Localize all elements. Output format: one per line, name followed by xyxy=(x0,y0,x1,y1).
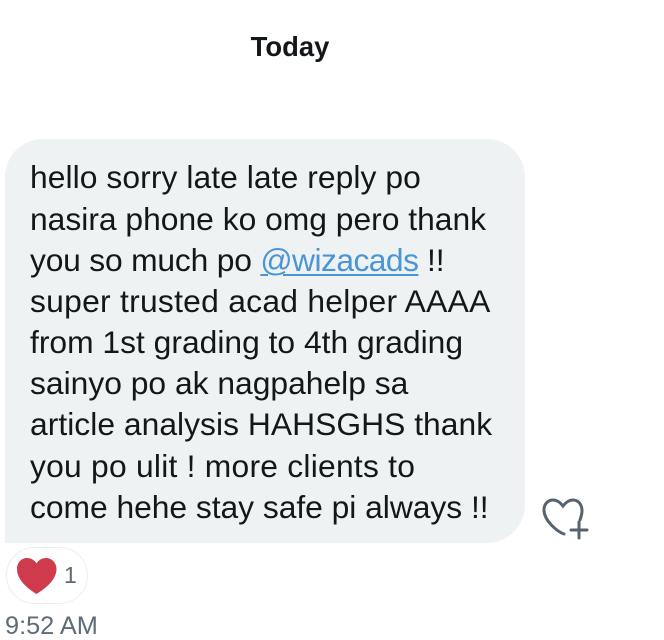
message text: you so much po @wizacads !! xyxy=(30,242,444,278)
icon: add reaction heart xyxy=(542,498,588,540)
heading: Today: Today xyxy=(251,31,329,62)
message text: hello sorry late late reply po xyxy=(30,159,421,195)
timestamp: 9:52 AM xyxy=(5,612,98,640)
message text xyxy=(30,159,492,525)
message text: you po ulit ! more clients to xyxy=(30,448,415,484)
message bubble xyxy=(5,139,525,543)
message text: come hehe stay safe pi always !! xyxy=(30,489,489,525)
message text: nasira phone ko omg pero thank xyxy=(30,201,486,237)
reaction pill xyxy=(6,547,88,604)
message text: article analysis HAHSGHS thank xyxy=(30,406,492,442)
reaction count: 1 xyxy=(64,562,77,588)
message text: from 1st grading to 4th grading xyxy=(30,324,463,360)
message text: super trusted acad helper AAAA xyxy=(30,283,491,319)
message text: sainyo po ak nagpahelp sa xyxy=(30,365,408,401)
icon: red heart xyxy=(17,558,56,594)
